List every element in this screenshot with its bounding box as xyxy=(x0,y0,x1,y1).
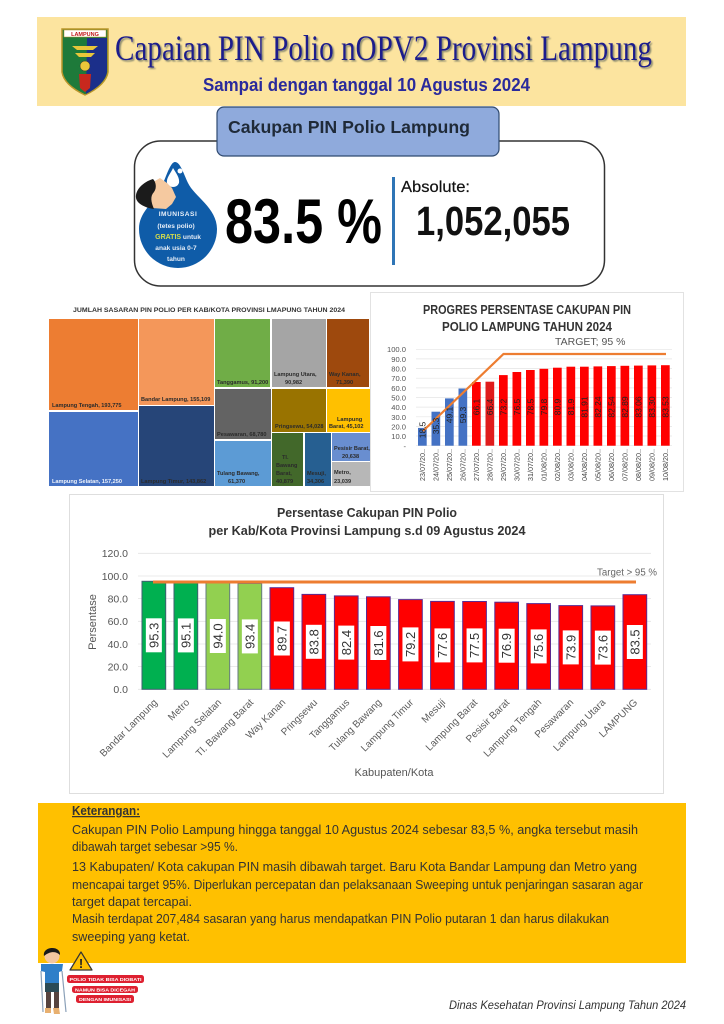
progress bar values: 66.4 xyxy=(485,398,495,415)
progress y axis: 90.0 xyxy=(391,355,406,364)
notes text: Masih terdapat 207,484 sasaran yang harus mendapatkan PIN Polio putaran 1 dan harus dilakukan xyxy=(72,912,609,926)
progress date labels: 07/08/20.. xyxy=(620,449,630,481)
district value labels: 75.6 xyxy=(531,634,546,659)
icon: Lampung provincial shield xyxy=(62,29,108,95)
notes text xyxy=(72,823,643,944)
progress bars xyxy=(418,365,670,446)
district chart title: Persentase Cakupan PIN Polio xyxy=(277,505,457,520)
treemap labels: Pringsewu, 54,028 xyxy=(275,424,324,430)
progress date labels: 26/07/20.. xyxy=(458,449,468,481)
district category labels: Pesisir Barat xyxy=(464,697,512,745)
polio message pills: NAMUN BISA DICEGAH xyxy=(75,988,136,994)
target label: TARGET; 95 % xyxy=(555,336,625,348)
treemap labels: Bandar Lampung, 155,109 xyxy=(141,397,210,403)
x axis title: Kabupaten/Kota xyxy=(355,767,434,779)
treemap labels: Barat, 45,102 xyxy=(329,424,364,430)
district value labels: 95.1 xyxy=(178,623,193,648)
district y axis: 80.0 xyxy=(108,594,128,606)
district category labels: Pesawaran xyxy=(533,697,576,740)
treemap labels: TI. xyxy=(282,455,289,461)
district value labels: 79.2 xyxy=(403,632,418,657)
district value labels: 73.9 xyxy=(563,635,578,660)
treemap labels: Mesuji, xyxy=(307,471,326,477)
progress bar values: 59.3 xyxy=(458,406,468,423)
icon: polio vaccine drop: anak usia 0-7 xyxy=(155,245,197,252)
treemap labels: 40,879 xyxy=(276,479,293,485)
progress date labels: 10/08/20.. xyxy=(661,449,670,481)
treemap labels: Metro, xyxy=(334,470,351,476)
progress bar values: 79.8 xyxy=(539,398,549,415)
y axis title: Persentase xyxy=(87,594,99,650)
progress chart title: PROGRES PERSENTASE CAKUPAN PIN xyxy=(423,303,631,317)
district y axis xyxy=(102,548,651,696)
progress date labels: 23/07/20.. xyxy=(418,449,427,481)
district y axis: 60.0 xyxy=(108,616,128,628)
progress bar values: 78.5 xyxy=(526,398,536,415)
district category labels: Lampung Timur xyxy=(359,697,417,754)
section tab: Cakupan PIN Polio Lampung: Cakupan PIN Polio Lampung xyxy=(228,117,470,137)
district value labels: 81.6 xyxy=(371,630,386,656)
treemap labels: Bawang xyxy=(276,463,298,469)
progress date labels xyxy=(418,449,670,481)
district value labels: 95.3 xyxy=(146,623,161,648)
district value labels: 93.4 xyxy=(242,624,257,649)
district value labels: 73.6 xyxy=(595,635,610,660)
coverage percentage: 83.5 % xyxy=(225,187,382,257)
district y axis: 0.0 xyxy=(113,684,128,696)
district value labels: 83.5 xyxy=(627,629,642,655)
progress y axis: 100.0 xyxy=(387,345,406,354)
panel: progress chart xyxy=(370,292,684,492)
panel: keterangan notes xyxy=(38,803,686,963)
district category labels: Pringsewu xyxy=(279,697,320,738)
progress date labels: 28/07/20.. xyxy=(486,449,494,481)
progress bar values: 82.54 xyxy=(606,396,616,418)
progress bar values xyxy=(418,396,670,438)
target label: Target > 95 % xyxy=(597,568,657,578)
progress y axis: 80.0 xyxy=(391,364,406,374)
progress date labels: 29/07/20.. xyxy=(499,449,508,481)
progress date labels: 31/07/20.. xyxy=(526,449,535,481)
district category labels: Tl. Bawang Barat xyxy=(194,697,256,759)
district value labels: 76.9 xyxy=(499,633,514,658)
progress date labels: 30/07/20.. xyxy=(512,449,522,481)
divider line xyxy=(392,177,395,265)
progress y axis: 30.0 xyxy=(391,413,406,422)
progress bar values: 73.2 xyxy=(498,398,508,415)
district category labels: Mesuji xyxy=(420,697,448,726)
footer credit: Dinas Kesehatan Provinsi Lampung Tahun 2024 xyxy=(449,1000,686,1012)
district value labels: 82.4 xyxy=(339,630,354,655)
treemap labels: Tulang Bawang, xyxy=(217,471,260,477)
progress date labels: 04/08/20.. xyxy=(580,449,589,481)
notes text: sweeping yang ketat. xyxy=(72,930,190,944)
district category labels: Tanggamus xyxy=(308,697,352,742)
notes heading: Keterangan: xyxy=(72,804,140,818)
notes text: 13 Kabupaten/ Kota cakupan PIN masih dibawah target. Baru Kota Bandar Lampung dan Metro yang xyxy=(72,860,637,874)
progress bar values: 83.53 xyxy=(660,396,670,418)
progress y axis: 40.0 xyxy=(391,403,406,412)
icon: polio vaccine drop: IMUNISASI xyxy=(159,211,197,218)
icon: polio vaccine drop: tahun xyxy=(167,256,185,263)
icon: polio vaccine drop: (tetes polio) xyxy=(157,223,195,230)
notes text: mencapai target 95%. Diperlukan percepatan dan pelaksanaan Sweeping untuk penjaringan sasaran agar xyxy=(72,878,643,892)
district y axis: 120.0 xyxy=(102,548,128,560)
target line xyxy=(423,354,666,431)
district category labels: Lampung Utara xyxy=(552,697,608,754)
district chart title xyxy=(208,505,526,538)
treemap labels: 71,390 xyxy=(336,380,353,386)
progress bar values: 18.5 xyxy=(418,421,428,438)
polio message pills: DENGAN IMUNISASI xyxy=(79,997,132,1003)
district category labels: Metro xyxy=(166,697,192,723)
district value labels: 94.0 xyxy=(210,623,225,649)
illustration: boy with crutches and warning xyxy=(41,948,144,1014)
absolute value: 1,052,055 xyxy=(416,198,570,244)
progress bar values: 66.1 xyxy=(472,398,482,415)
polio message pills xyxy=(67,975,144,1003)
polio message pills: POLIO TIDAK BISA DIOBATI xyxy=(70,977,142,983)
progress date labels: 06/08/20.. xyxy=(607,449,616,481)
district category labels: Lampung Barat xyxy=(424,697,480,753)
treemap labels: 34,306 xyxy=(307,479,324,485)
treemap title: JUMLAH SASARAN PIN POLIO PER KAB/KOTA PROVINSI LMAPUNG TAHUN 2024 xyxy=(73,307,345,314)
progress bar values: 35.3 xyxy=(431,417,441,434)
treemap labels: Tanggamus, 91,200 xyxy=(217,380,268,386)
treemap labels: Lampung Utara, xyxy=(274,372,317,378)
district category labels xyxy=(98,697,640,761)
treemap cells xyxy=(49,319,370,486)
section tab: Cakupan PIN Polio Lampung xyxy=(217,107,499,156)
district category labels: LAMPUNG xyxy=(597,697,640,740)
icon: polio vaccine drop: GRATIS untuk xyxy=(155,234,201,241)
progress chart title: POLIO LAMPUNG TAHUN 2024 xyxy=(442,320,612,334)
treemap labels: 90,982 xyxy=(285,380,302,386)
treemap labels xyxy=(52,372,370,485)
treemap labels: 61,370 xyxy=(228,479,245,485)
progress bar values: 76.5 xyxy=(512,398,522,415)
treemap labels: Pesisir Barat, xyxy=(334,446,370,452)
notes text: target dapat tercapai. xyxy=(72,895,192,909)
treemap labels: Lampung Timur, 143,862 xyxy=(141,479,206,485)
district chart title: per Kab/Kota Provinsi Lampung s.d 09 Agustus 2024 xyxy=(208,523,526,538)
treemap labels: 23,039 xyxy=(334,479,351,485)
progress bar values: 80.9 xyxy=(552,398,562,415)
icon: boy xyxy=(41,948,66,1014)
header banner xyxy=(37,17,686,106)
icon: warning triangle: ! xyxy=(79,956,83,971)
treemap labels: Lampung xyxy=(337,417,363,423)
progress bar values: 81.91 xyxy=(580,396,590,418)
subtitle: Sampai dengan tanggal 10 Agustus 2024 xyxy=(203,75,530,95)
progress date labels: 24/07/20.. xyxy=(432,449,440,481)
notes text: dibawah target sebesar >95 %. xyxy=(72,840,238,854)
progress y axis xyxy=(387,345,672,451)
progress bar values: 49.1 xyxy=(444,406,454,423)
progress date labels: 01/08/20.. xyxy=(540,449,548,481)
progress y axis: 60.0 xyxy=(391,384,406,393)
progress bar values: 82.89 xyxy=(620,396,630,418)
progress chart title xyxy=(423,303,631,334)
panel: coverage per district chart xyxy=(70,494,664,794)
district category labels: Lampung Tengah xyxy=(482,697,544,760)
progress date labels: 27/07/20.. xyxy=(472,449,481,481)
progress bar values: 82.24 xyxy=(593,396,603,418)
treemap labels: Barat, xyxy=(276,471,292,477)
district bars xyxy=(142,581,647,689)
progress date labels: 03/08/20.. xyxy=(566,449,576,481)
treemap labels: Way Kanan, xyxy=(329,372,361,378)
district category labels: Lampung Selatan xyxy=(161,697,224,761)
treemap labels: Lampung Selatan, 157,250 xyxy=(52,479,122,485)
progress date labels: 05/08/20.. xyxy=(594,449,602,481)
progress y axis: 50.0 xyxy=(391,394,406,402)
treemap labels: 20,638 xyxy=(342,454,359,460)
progress bar values: 83.30 xyxy=(647,396,657,418)
progress y axis: 20.0 xyxy=(391,422,406,432)
treemap labels: Pesawaran, 68,780 xyxy=(217,432,266,438)
progress bar values: 81.9 xyxy=(566,398,576,415)
district y axis: 100.0 xyxy=(102,571,128,583)
progress date labels: 25/07/20.. xyxy=(445,449,454,481)
icon: Lampung provincial shield: LAMPUNG xyxy=(71,32,99,38)
district category labels: Bandar Lampung xyxy=(98,697,160,759)
treemap: jumlah sasaran xyxy=(49,307,370,486)
district category labels: Way Kanan xyxy=(244,697,288,741)
district value labels: 77.6 xyxy=(435,633,450,658)
district y axis: 20.0 xyxy=(108,662,128,674)
progress y axis: 70.0 xyxy=(391,374,406,383)
district y axis: 40.0 xyxy=(108,639,128,651)
panel: coverage summary xyxy=(134,141,604,286)
district value labels xyxy=(146,618,643,665)
progress date labels: 09/08/20.. xyxy=(648,449,656,481)
progress date labels: 08/08/20.. xyxy=(634,449,643,481)
progress y axis: - xyxy=(403,442,406,451)
notes text: Cakupan PIN Polio Lampung hingga tanggal 10 Agustus 2024 sebesar 83,5 %, angka tersebut masih xyxy=(72,823,638,837)
treemap labels: Lampung Tengah, 193,775 xyxy=(52,403,122,409)
progress date labels: 02/08/20.. xyxy=(553,449,562,481)
district category labels: Tulang Bawang xyxy=(327,697,384,754)
district value labels: 77.5 xyxy=(467,633,482,658)
absolute label: Absolute: xyxy=(401,179,470,196)
target line xyxy=(153,580,636,584)
district value labels: 83.8 xyxy=(306,629,321,654)
progress bar values: 83.06 xyxy=(634,396,644,418)
progress y axis: 10.0 xyxy=(391,432,406,441)
district value labels: 89.7 xyxy=(274,626,289,651)
icon: polio vaccine drop xyxy=(136,162,217,268)
